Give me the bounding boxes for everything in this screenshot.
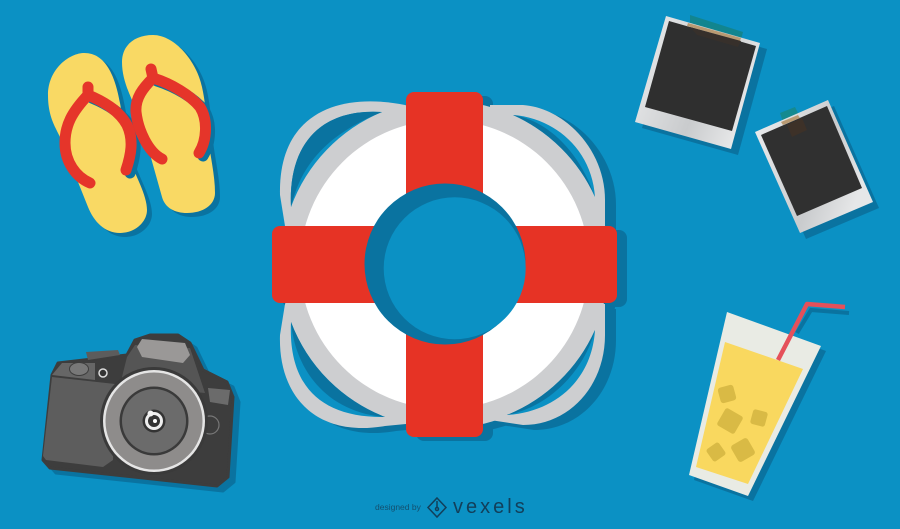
grey ring	[280, 100, 608, 428]
right control panel	[208, 388, 230, 405]
straw shadow	[797, 310, 849, 333]
polaroid shadow	[761, 106, 879, 239]
frame	[755, 100, 873, 233]
photo	[761, 106, 862, 216]
frame	[635, 16, 760, 149]
icon: vexels diamond	[428, 498, 446, 517]
rope loop: bottom left	[280, 304, 406, 428]
buoy shadow	[282, 96, 627, 441]
icon: polaroid 1	[635, 15, 767, 155]
rope loop: top left	[280, 101, 405, 226]
rope gap shadow: bottom left	[291, 322, 385, 417]
tape behind	[690, 15, 743, 40]
camera grip	[43, 377, 115, 467]
inner hole	[384, 197, 526, 339]
tape over	[687, 23, 741, 41]
icon: drink glass	[689, 304, 849, 501]
designed by: designed by	[375, 502, 422, 512]
rope gap shadow: top left	[291, 112, 382, 207]
lens	[100, 367, 208, 475]
camera shadow	[49, 340, 239, 491]
camera body	[43, 335, 233, 486]
tape behind	[780, 107, 799, 122]
photo	[645, 21, 756, 131]
rope gap: bottom right	[507, 330, 595, 415]
rope gap shadow: top right	[513, 115, 595, 197]
ice cubes	[706, 384, 768, 463]
rope gap: top right	[513, 115, 595, 197]
glass shadow	[694, 317, 826, 501]
logo: vexels	[375, 496, 528, 518]
glass	[689, 312, 821, 496]
rope gap: top left	[291, 112, 382, 207]
right strap shadow	[157, 81, 210, 156]
side dial	[201, 416, 219, 434]
right strap	[136, 69, 206, 159]
white ring body	[300, 120, 589, 409]
tape over	[781, 115, 800, 125]
left strap	[65, 87, 131, 183]
icon: life buoy	[272, 92, 627, 441]
rope gap shadow: bottom right	[507, 330, 595, 415]
juice	[696, 342, 803, 484]
vexels wordmark: vexels	[453, 496, 528, 518]
top plate	[52, 363, 95, 380]
rope gap: bottom left	[291, 322, 385, 417]
icon: polaroid 2	[755, 100, 879, 239]
inner hole shadow	[364, 184, 526, 344]
icon: camera	[43, 335, 239, 491]
rope loop: bottom right	[490, 304, 605, 425]
right sole	[122, 35, 215, 213]
viewfinder panel	[137, 339, 190, 363]
mode knob	[70, 362, 88, 376]
right flip-flop shadow	[127, 39, 220, 217]
rope loop: top right	[490, 105, 605, 226]
icon: flip-flops	[48, 35, 220, 237]
left strap shadow	[92, 98, 135, 173]
small ring button	[99, 369, 107, 377]
flash housing	[86, 350, 120, 360]
straw	[778, 304, 845, 360]
left sole	[48, 53, 147, 233]
left flip-flop shadow	[53, 57, 152, 237]
red vertical band	[406, 92, 483, 437]
red horizontal band	[272, 226, 617, 303]
polaroid shadow	[642, 22, 767, 155]
prism	[120, 345, 205, 393]
